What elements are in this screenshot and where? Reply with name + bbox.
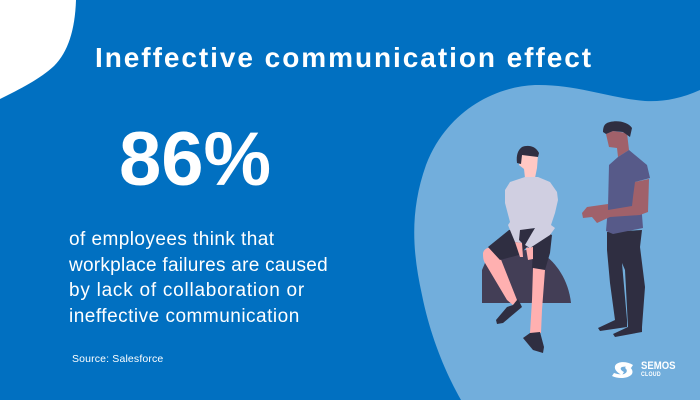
logo text: SEMOS [641,360,676,372]
title: Ineffective communication effect [95,42,593,73]
description text: of employees think that [69,229,275,250]
description text [69,229,328,326]
description text: workplace failures are caused [69,254,328,276]
illustration: seated person [482,146,571,353]
face and neck [606,131,629,157]
source: Source: Salesforce [72,353,163,365]
arm and hand [582,179,649,223]
front shoe [523,332,544,353]
description text: by lack of collaboration or [69,280,305,301]
face and neck [519,155,538,178]
logo text [641,360,676,378]
sweater [505,177,558,248]
stool [482,250,571,303]
big statistic: 86% [119,117,271,202]
hands [515,242,533,260]
logo text: CLOUD [641,372,661,378]
hair [517,146,539,164]
white corner blob [0,0,76,99]
t-shirt [606,150,650,234]
illustration: standing person [582,121,650,337]
description text: ineffective communication [69,306,300,326]
front leg [530,268,545,333]
shorts [488,228,552,270]
hair [603,121,632,137]
back shoe [496,299,522,324]
light blue blob [414,85,700,400]
logo mark [612,362,633,378]
shoes [598,320,642,337]
trousers [607,230,645,327]
back leg [483,248,517,305]
